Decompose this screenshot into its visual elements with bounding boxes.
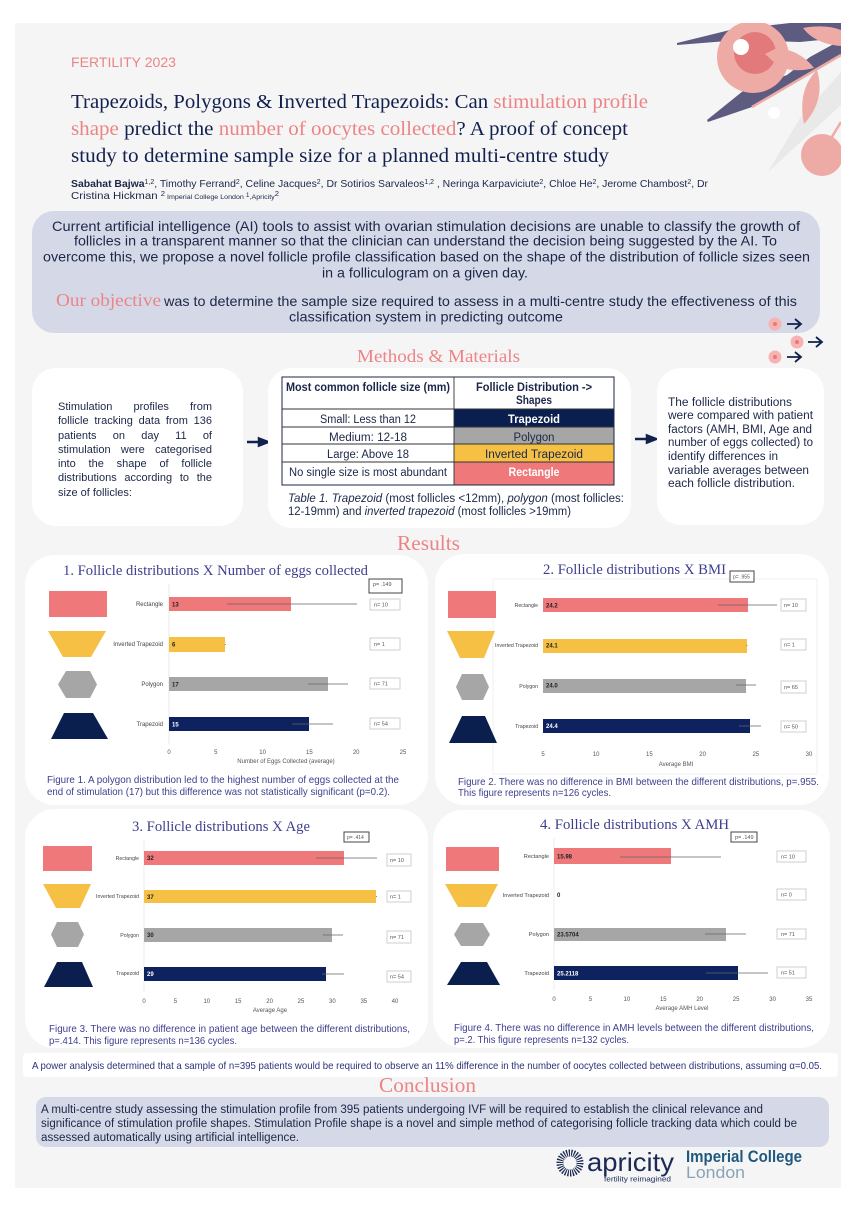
heading: conclusion: Conclusion [379, 1073, 477, 1097]
table caption: 12-19mm) and inverted trapezoid (most follicles >19mm) [288, 506, 571, 518]
table 1: Polygon [514, 432, 554, 444]
table 1: No single size is most abundant [289, 467, 448, 479]
chart 2 bars: Inverted Trapezoid [495, 643, 538, 649]
chart 3 bars: 25 [298, 999, 305, 1005]
table 1: Rectangle [508, 467, 560, 479]
heading: results: Results [397, 531, 460, 555]
panel: comparison text: were compared with patient [667, 410, 814, 422]
authors: Cristina Hickman [71, 190, 150, 202]
chart 4 bars: Average AMH Level [656, 1006, 708, 1012]
table 1 [282, 377, 614, 485]
text block: stimulation profiles: distributions according to the [58, 472, 212, 484]
chart 1 bars: 17 [172, 682, 179, 688]
authors: 2 [317, 179, 321, 186]
table 1: Medium: 12-18 [329, 432, 407, 444]
figure 3 caption: Figure 3. There was no difference in patient age between the different distributions, [49, 1023, 410, 1035]
panel: comparison text [657, 368, 824, 525]
panel: background and objective: overcome this, we propose a novel follicle profile classification based on the shape of the distribution of follicle sizes seen [43, 248, 810, 264]
authors: , Neringa Karpaviciute [434, 178, 540, 190]
chart 4 bars: n= 51 [781, 970, 795, 976]
authors: , Jerome Chambost [596, 178, 687, 190]
table 1: Small: Less than 12 [320, 414, 416, 426]
decorative illustration: follicles and streaks [677, 21, 843, 176]
chart 4 bars: Trapezoid [524, 971, 549, 977]
title: Trapezoids, Polygons & Inverted Trapezoids: Can stimulation profile [71, 91, 648, 113]
panel: comparison text: identify differences in [668, 451, 778, 463]
panel: background and objective: was to determine the sample size required to assess in a multi-centre study the effectiveness of this [163, 293, 797, 309]
figure 2 caption: This figure represents n=126 cycles. [458, 787, 611, 799]
table 1: Inverted Trapezoid [485, 449, 583, 461]
chart 4 bars [503, 832, 813, 1012]
chart 1 bars: Trapezoid [137, 722, 163, 728]
chart 2 bars: Average BMI [659, 762, 694, 768]
conference label: FERTILITY 2023 [71, 54, 176, 70]
chart 3 bars: n= 54 [390, 974, 404, 980]
text block: stimulation profiles: Stimulation profiles from [58, 401, 212, 413]
panel: comparison text: number of eggs collected) to [668, 437, 813, 449]
chart 1 bars: 10 [259, 750, 267, 756]
chart 1 bars: n= 71 [374, 682, 388, 688]
authors: 2 [236, 179, 240, 186]
chart 2 bars: Rectangle [515, 603, 538, 609]
chart 2 bars: 5 [541, 752, 545, 758]
chart 1 bars: Inverted Trapezoid [113, 642, 163, 648]
chart 1 bars: Polygon [141, 682, 163, 688]
chart 3 bars: 5 [174, 999, 178, 1005]
chart 4 bars: Rectangle [524, 854, 549, 860]
text block: stimulation profiles: follicle tracking data from 136 [58, 415, 212, 427]
authors: 2 [593, 179, 596, 186]
chart 2 bars: 20 [699, 752, 707, 758]
chart 4 bars: 15.98 [557, 854, 573, 860]
authors: 2 [161, 191, 165, 198]
logo: apricity [560, 1147, 674, 1184]
chart 2 bars: n= 50 [784, 724, 798, 730]
logo: apricity: fertility reimagined [604, 1174, 671, 1184]
authors: Imperial College London [165, 194, 246, 201]
figure 1 caption: Figure 1. A polygon distribution led to the highest number of eggs collected at the [47, 774, 399, 786]
chart 1 bars: n= 1 [374, 642, 385, 648]
figure 2 caption: Figure 2. There was no difference in BMI between the different distributions, p=.955. [458, 776, 819, 788]
chart 3 bars: 20 [266, 999, 274, 1005]
chart 3 bars: 0 [142, 999, 146, 1005]
icons: small follicle arrows [768, 318, 822, 364]
chart 4 bars: 30 [769, 997, 777, 1003]
logo: apricity: apricity [587, 1147, 674, 1177]
figure 3 caption: p=.414. This figure represents n=136 cycles. [49, 1035, 237, 1047]
chart 1 bars: 6 [172, 642, 176, 648]
chart 1 bars: n= 10 [374, 602, 388, 608]
chart 1 bars: 15 [306, 750, 313, 756]
chart 3 shapes [43, 846, 93, 987]
chart 2 bars: 24.1 [546, 644, 558, 650]
chart 4 bars: 25.2118 [557, 972, 579, 978]
chart 1 bars: 25 [400, 750, 407, 756]
panel: background and objective: in a folliculogram on a given day. [322, 264, 528, 280]
chart 4 bars: 15 [660, 997, 667, 1003]
panel: comparison text: The follicle distributions [668, 397, 792, 409]
chart 3 bars: 10 [203, 999, 211, 1005]
chart 1 bars: Number of Eggs Collected (average) [237, 759, 335, 765]
title: shape predict the number of oocytes collected ? A proof of concept [71, 118, 628, 140]
chart 3 bars: n= 71 [390, 935, 404, 941]
chart 2 title: 2. Follicle distributions X BMI [543, 562, 726, 578]
chart 2 bars: Trapezoid [515, 724, 538, 730]
authors: 2 [539, 179, 543, 186]
chart 3 bars: n= 1 [390, 894, 401, 900]
panel: background and objective [32, 211, 820, 333]
chart 1 bars: 15 [172, 722, 179, 728]
figure 4 caption: Figure 4. There was no difference in AMH levels between the different distributions, [454, 1022, 814, 1034]
chart 1 bars: 0 [167, 750, 171, 756]
panel: comparison text: factors (AMH, BMI, Age and [668, 424, 812, 436]
power analysis strip [23, 1053, 838, 1077]
table 1: Follicle Distribution -> [476, 382, 592, 394]
panel: stimulation profiles [32, 368, 243, 526]
chart 4 bars: 0 [552, 997, 556, 1003]
chart 4 bars: 35 [806, 997, 813, 1003]
authors: 1,2 [424, 179, 434, 186]
chart 3 bars: n= 10 [390, 858, 404, 864]
table 1: Most common follicle size (mm) [286, 382, 450, 394]
panel: comparison text: variable averages between [668, 465, 809, 477]
chart 2 bars [495, 571, 813, 768]
text block: stimulation profiles [58, 401, 212, 499]
chart 1 shapes [48, 591, 108, 739]
table 1: Trapezoid [508, 414, 560, 426]
authors: ,Apricity [250, 194, 276, 201]
chart 4 title: 4. Follicle distributions X AMH [540, 817, 730, 833]
chart 2 bars: n= 65 [784, 685, 798, 691]
text block: stimulation profiles: size of follicles: [58, 487, 132, 499]
authors: , Celine Jacques [240, 178, 317, 190]
panel: comparison text: each follicle distribution. [668, 478, 795, 490]
text block: stimulation profiles: patients on day 11 of [58, 430, 212, 442]
figure 2 caption [458, 776, 819, 799]
chart 4 bars: 25 [733, 997, 740, 1003]
panel: background and objective: Our objective [56, 290, 161, 310]
chart 2 bars: n= 1 [784, 642, 795, 648]
chart 2 shapes [447, 579, 817, 774]
chart 1 title: 1. Follicle distributions X Number of eggs collected [63, 563, 369, 579]
chart 3 bars: 30 [147, 933, 154, 939]
chart 2 bars: 10 [593, 752, 600, 758]
chart 2 bars: 24.4 [546, 724, 558, 730]
chart 3 bars: Average Age [253, 1008, 288, 1014]
authors: Sabahat Bajwa [71, 178, 145, 190]
panel: background and objective: follicles in a transparent manner so that the clinician can understand the decision being suggested by the AI. To [74, 232, 777, 248]
chart 3 bars: 32 [147, 856, 154, 862]
table 1: Shapes [516, 395, 552, 407]
chart 2 bars: 25 [752, 752, 760, 758]
chart 2 bars: 30 [806, 752, 813, 758]
chart 4 bars: 5 [589, 997, 593, 1003]
chart 3 bars: Trapezoid [116, 971, 139, 977]
panel: chart 1 eggs collected [25, 555, 428, 805]
chart 4 bars: n= 10 [781, 854, 795, 860]
logo: Imperial College London [686, 1148, 802, 1182]
chart 3 bars: 15 [235, 999, 242, 1005]
figure 4 caption [454, 1022, 814, 1046]
chart 3 bars: 37 [147, 895, 154, 901]
chart 2 bars: n= 10 [784, 603, 798, 609]
chart 4 bars: p= .149 [735, 835, 754, 841]
chart 3 bars: 29 [147, 972, 154, 978]
chart 1 bars: p= .149 [373, 582, 392, 588]
authors: , Chloe He [543, 178, 593, 190]
chart 3 bars [96, 832, 411, 1014]
title: study to determine sample size for a planned multi-centre study [71, 145, 610, 167]
authors: , Dr [691, 178, 708, 190]
arrow: to table [247, 438, 268, 446]
chart 4 bars: 0 [557, 893, 561, 899]
chart 1 bars: 5 [214, 750, 218, 756]
authors: 2 [275, 191, 279, 198]
chart 4 bars: n= 71 [781, 932, 795, 938]
arrow: to comparison [635, 436, 656, 442]
chart 4 bars: Inverted Trapezoid [503, 893, 549, 899]
panel: conclusion text [36, 1097, 829, 1147]
chart 2 bars: 24.0 [546, 684, 558, 690]
chart 3 bars: Polygon [120, 933, 139, 939]
chart 3 bars: 40 [392, 999, 399, 1005]
chart 1 bars: Rectangle [136, 602, 164, 608]
table 1: Large: Above 18 [327, 449, 409, 461]
chart 2 bars: 24.2 [546, 604, 558, 610]
chart 1 bars: n= 54 [374, 722, 388, 728]
chart 4 bars: 10 [624, 997, 631, 1003]
chart 4 bars: 20 [696, 997, 704, 1003]
chart 1 bars [113, 579, 407, 765]
panel: chart 2 BMI [435, 554, 829, 805]
chart 3 bars: 35 [360, 999, 368, 1005]
figure 3 caption [49, 1023, 410, 1047]
authors: , Dr Sotirios Sarvaleos [321, 178, 424, 190]
table caption [288, 493, 624, 518]
authors: 2 [687, 179, 691, 186]
authors: , Timothy Ferrand [154, 178, 236, 190]
table caption: Table 1. Trapezoid (most follicles <12mm), polygon (most follicles: [288, 493, 624, 505]
chart 4 shapes [445, 847, 500, 985]
panel: conclusion text: significance of stimulation profile shapes. Stimulation Profile shape is a novel and simple method of categorising follicle tracking data which could be [41, 1118, 797, 1130]
figure 1 caption [47, 774, 399, 798]
chart 2 bars: Polygon [519, 684, 538, 690]
figure 4 caption: p=.2. This figure represents n=132 cycles. [454, 1034, 629, 1046]
chart 1 bars: 20 [353, 750, 360, 756]
title [71, 91, 648, 167]
authors: 1 [246, 193, 250, 199]
chart 3 bars: p= .414 [347, 835, 364, 841]
panel: follicle table [268, 368, 631, 528]
authors: 1,2 [145, 179, 154, 186]
figure 1 caption: end of stimulation (17) but this difference was not statistically significant (p=0.2). [47, 786, 390, 798]
chart 3 bars: Rectangle [116, 856, 139, 862]
text block: stimulation profiles: stimulation were categorised [58, 444, 212, 456]
panel: conclusion text: A multi-centre study assessing the stimulation profile from 395 patients undergoing IVF will be required to establish the clinical relevance and [41, 1104, 763, 1116]
panel: background and objective: Current artificial intelligence (AI) tools to assist with ovarian stimulation decisions are unable to classify the growth of [52, 218, 800, 234]
chart 4 bars: Polygon [529, 932, 549, 938]
text block: stimulation profiles: into the shape of follicle [58, 458, 212, 470]
chart 4 bars: n= 0 [781, 892, 792, 898]
logo: Imperial College London: Imperial College [686, 1148, 802, 1166]
authors [71, 178, 708, 202]
chart 3 title: 3. Follicle distributions X Age [132, 819, 310, 835]
logo: Imperial College London: London [686, 1164, 745, 1182]
panel: chart 3 age [25, 809, 428, 1048]
chart 3 bars: 30 [329, 999, 336, 1005]
chart 3 bars: Inverted Trapezoid [96, 894, 139, 900]
chart 2 bars: p= .955 [733, 574, 750, 580]
panel: chart 4 AMH [433, 810, 830, 1048]
chart 4 bars: 23.5704 [557, 932, 579, 938]
panel: conclusion text: assessed automatically using artificial intelligence. [41, 1132, 299, 1144]
chart 2 bars: 15 [646, 752, 653, 758]
panel: background and objective: classification system in predicting outcome [289, 308, 563, 324]
chart 1 bars: 13 [172, 602, 179, 608]
heading: methods and materials: Methods & Materials [357, 346, 520, 366]
